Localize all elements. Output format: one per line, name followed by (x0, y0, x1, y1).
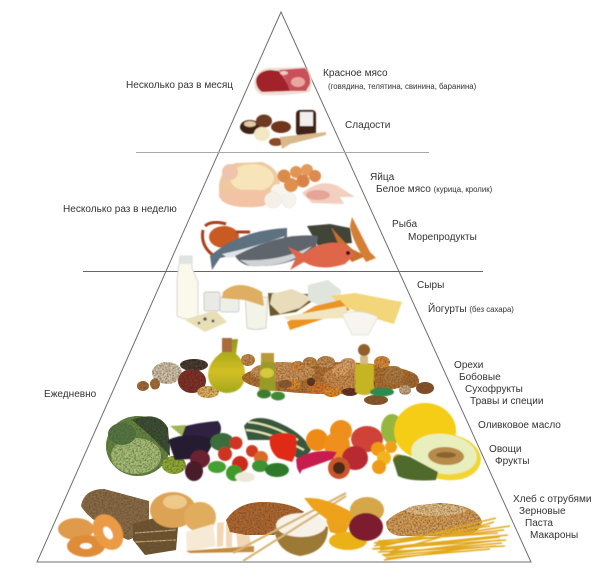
label: olive oil: Оливковое масло (478, 420, 561, 431)
label: frequency weekly: Несколько раз в неделю (63, 204, 177, 215)
label: dried fruits: Сухофрукты (465, 383, 523, 395)
label: eggs: Яйца (370, 172, 395, 183)
food: olive oil jug (208, 338, 245, 393)
food: red meat (254, 67, 312, 95)
food: herbs and small bottles (257, 344, 394, 400)
food: yogurt and glass (204, 292, 268, 330)
food: cabbage (106, 416, 186, 476)
food: tomatoes and basil (208, 433, 289, 482)
label: bran bread: Хлеб с отрубями (513, 493, 591, 505)
food: buns and toast bread (150, 492, 254, 553)
label: yogurt: Йогурты (без сахара) (428, 302, 514, 315)
label: seafood: Морепродукты (408, 232, 477, 243)
food: shellfish (307, 217, 376, 262)
food: crusty loaf (386, 503, 482, 536)
food: legumes (137, 359, 219, 398)
food: eggplant and onions (168, 421, 221, 481)
label: pasta: Паста (525, 518, 553, 529)
pyramid outline (37, 12, 531, 562)
food: rye loaf (226, 502, 304, 535)
label: fish: Рыба (392, 218, 417, 230)
food: fruits (296, 414, 403, 479)
label: white meat: Белое мясо (курица, кролик) (376, 184, 493, 195)
food: spaghetti (372, 518, 510, 560)
food: sweets (240, 110, 326, 149)
food: cheeses (185, 280, 402, 335)
label: cheese: Сыры (417, 280, 444, 291)
label: grains: Зерновые (519, 506, 566, 517)
food: melon and avocado (393, 403, 484, 485)
label: nuts: Орехи (454, 360, 483, 371)
label: legumes: Бобовые (459, 371, 501, 383)
food: eggs (264, 164, 321, 208)
food: fish (210, 228, 355, 270)
label: frequency daily: Ежедневно (44, 389, 97, 400)
food: milk bottle (177, 256, 198, 319)
label: sweets: Сладости (345, 120, 390, 131)
label: red meat types: (говядина, телятина, свинина, баранина) (328, 82, 477, 91)
label: vegetables: Овощи (489, 444, 522, 455)
food: crab (202, 222, 250, 256)
label: macaroni: Макароны (530, 530, 578, 541)
food: corn and pasta (304, 497, 384, 550)
label: fruits: Фрукты (495, 456, 529, 467)
food: dried fruits and nuts (241, 354, 434, 405)
label: herbs and spices: Травы и специи (470, 396, 544, 407)
food: bagels (58, 509, 130, 557)
food: rice bowl and chopsticks (233, 493, 346, 561)
food: dark bread (81, 489, 178, 555)
food: squash and pepper (244, 418, 311, 462)
food: poultry (219, 162, 355, 207)
label: frequency monthly: Несколько раз в месяц (126, 80, 233, 91)
label: red meat: Красное мясо (323, 68, 388, 79)
